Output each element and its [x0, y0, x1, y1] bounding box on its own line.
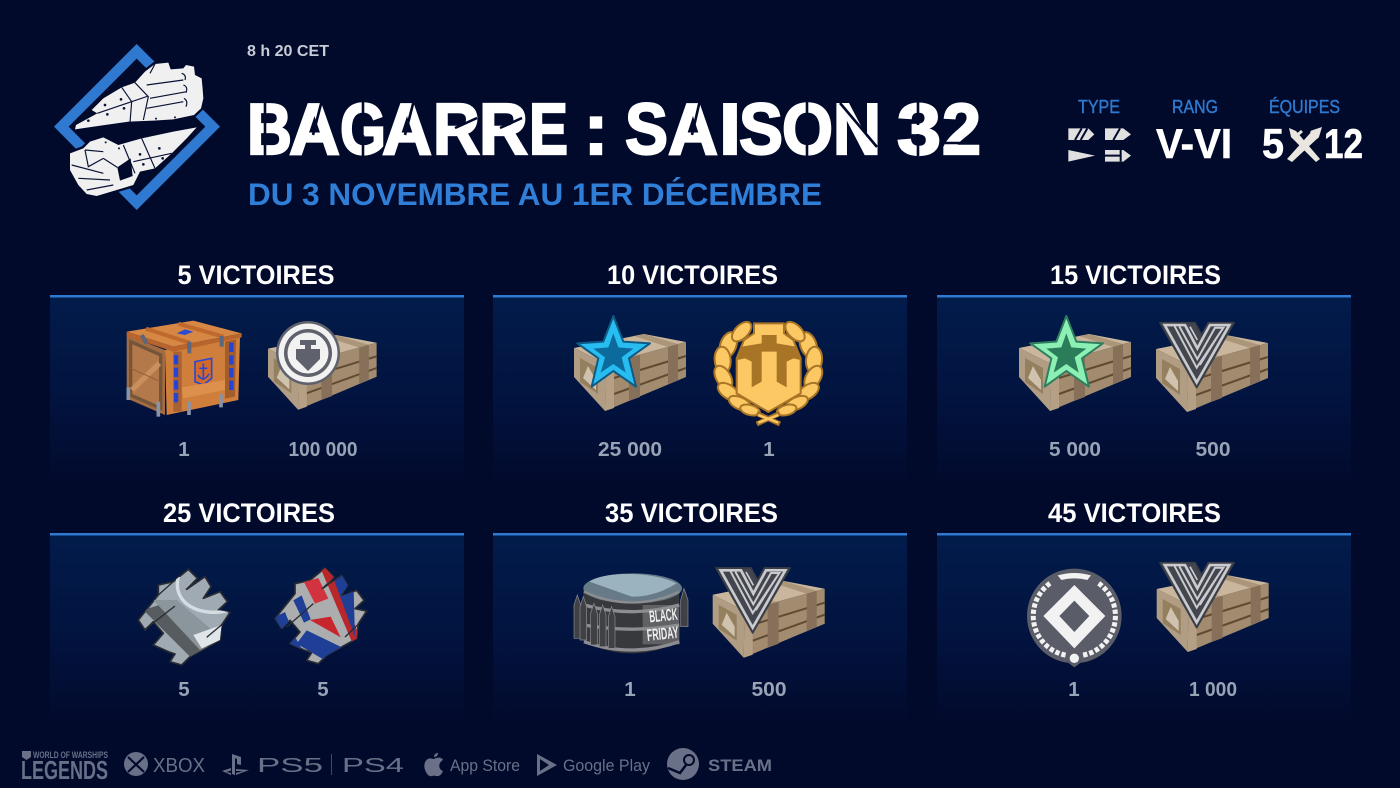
icon: crate with V badge: [1156, 323, 1268, 412]
teams value: 12: [1324, 120, 1363, 167]
title: 2: [942, 90, 981, 170]
quantity: 500: [752, 678, 786, 701]
teams value: 5: [1262, 120, 1284, 167]
title: R: [433, 90, 480, 170]
logo: PlayStation 5 and 4: PS5: [257, 755, 323, 777]
icon: crate with blue star: [574, 316, 686, 411]
icon: Black Friday container: [574, 573, 688, 653]
quantity: 25 000: [598, 438, 662, 461]
title: G: [340, 90, 386, 170]
heading: 15 VICTOIRES: [1050, 260, 1221, 290]
heading: 10 VICTOIRES: [607, 260, 778, 290]
title: O: [782, 90, 833, 170]
icon: crossed swords: [1287, 127, 1322, 162]
title: A: [289, 90, 340, 170]
title: A: [382, 90, 432, 170]
logo: Xbox: [124, 752, 205, 777]
panel: 35 victoires: [493, 498, 907, 723]
title: 3: [897, 90, 941, 170]
quantity: 1 000: [1189, 678, 1237, 701]
container label: BLACK: [648, 605, 678, 626]
logo: Steam: STEAM: [708, 756, 772, 775]
battle info: type, rank, teams: [1068, 97, 1363, 167]
icon: ship types: [1068, 128, 1131, 162]
title: N: [833, 90, 881, 170]
panel: 25 victoires: [50, 503, 464, 696]
title: A: [668, 90, 718, 170]
logo: World of Warships Legends: WORLD OF WARSHIPS: [33, 750, 108, 760]
icon: rank emblem: [1027, 569, 1122, 667]
heading: 5 VICTOIRES: [178, 260, 334, 290]
logo: Google Play: [537, 754, 650, 776]
quantity: 500: [1196, 438, 1230, 461]
panel: 5 victoires: [50, 260, 464, 485]
heading: 35 VICTOIRES: [605, 498, 778, 528]
title: S: [625, 90, 668, 170]
logo: Steam: [667, 748, 772, 780]
quantity: 100 000: [288, 438, 358, 461]
type label: TYPE: [1078, 97, 1120, 117]
time: 8 h 20 CET: [247, 43, 329, 60]
icon: crate with V badge: [1157, 563, 1269, 652]
title: R: [479, 90, 528, 170]
logo: World of Warships Legends: [21, 750, 108, 785]
logo: App Store: App Store: [450, 756, 520, 775]
quantity: 1: [1068, 678, 1080, 701]
logo: Xbox: XBOX: [153, 755, 205, 777]
icon: crate with V badge: [713, 568, 825, 658]
logo: App Store: [424, 753, 520, 776]
title: E: [529, 90, 568, 170]
panel: 10 victoires: [493, 260, 907, 485]
panel: 15 victoires: [937, 260, 1351, 485]
heading: 45 VICTOIRES: [1048, 498, 1221, 528]
quantity: 1: [763, 438, 775, 461]
logo: crossed gauntlets in a blue diamond: [54, 44, 220, 210]
icon: crate with green star: [1019, 316, 1131, 411]
icon: crate with credits badge: [268, 321, 377, 410]
icon: gold laurel emblem: [711, 318, 826, 424]
heading: 25 VICTOIRES: [163, 498, 335, 528]
rank label: RANG: [1172, 97, 1218, 117]
logo: PlayStation 5 and 4: PS4: [342, 755, 404, 777]
icon: grey emblem: [138, 569, 230, 665]
icon: Union Jack emblem: [275, 567, 367, 664]
quantity: 1: [178, 438, 190, 461]
quantity: 5 000: [1049, 438, 1101, 461]
logo: World of Warships Legends: LEGENDS: [21, 755, 108, 785]
title: S: [739, 90, 783, 170]
logo: PlayStation 5 and 4: [222, 754, 404, 777]
quantity: 5: [317, 678, 329, 701]
title: :: [584, 90, 608, 170]
title: I: [719, 90, 741, 170]
teams label: ÉQUIPES: [1269, 97, 1340, 117]
panel: 45 victoires: [937, 498, 1351, 723]
subtitle: DU 3 NOVEMBRE AU 1ER DÉCEMBRE: [248, 176, 822, 212]
quantity: 1: [624, 678, 636, 701]
logo: Google Play: Google Play: [563, 756, 650, 775]
title: B: [247, 90, 292, 170]
title: [247, 90, 982, 170]
rank value: V-VI: [1156, 120, 1232, 167]
container label: FRIDAY: [646, 623, 679, 645]
quantity: 5: [178, 678, 190, 701]
footer: platform logos: [21, 748, 772, 785]
icon: orange container: [127, 321, 242, 417]
